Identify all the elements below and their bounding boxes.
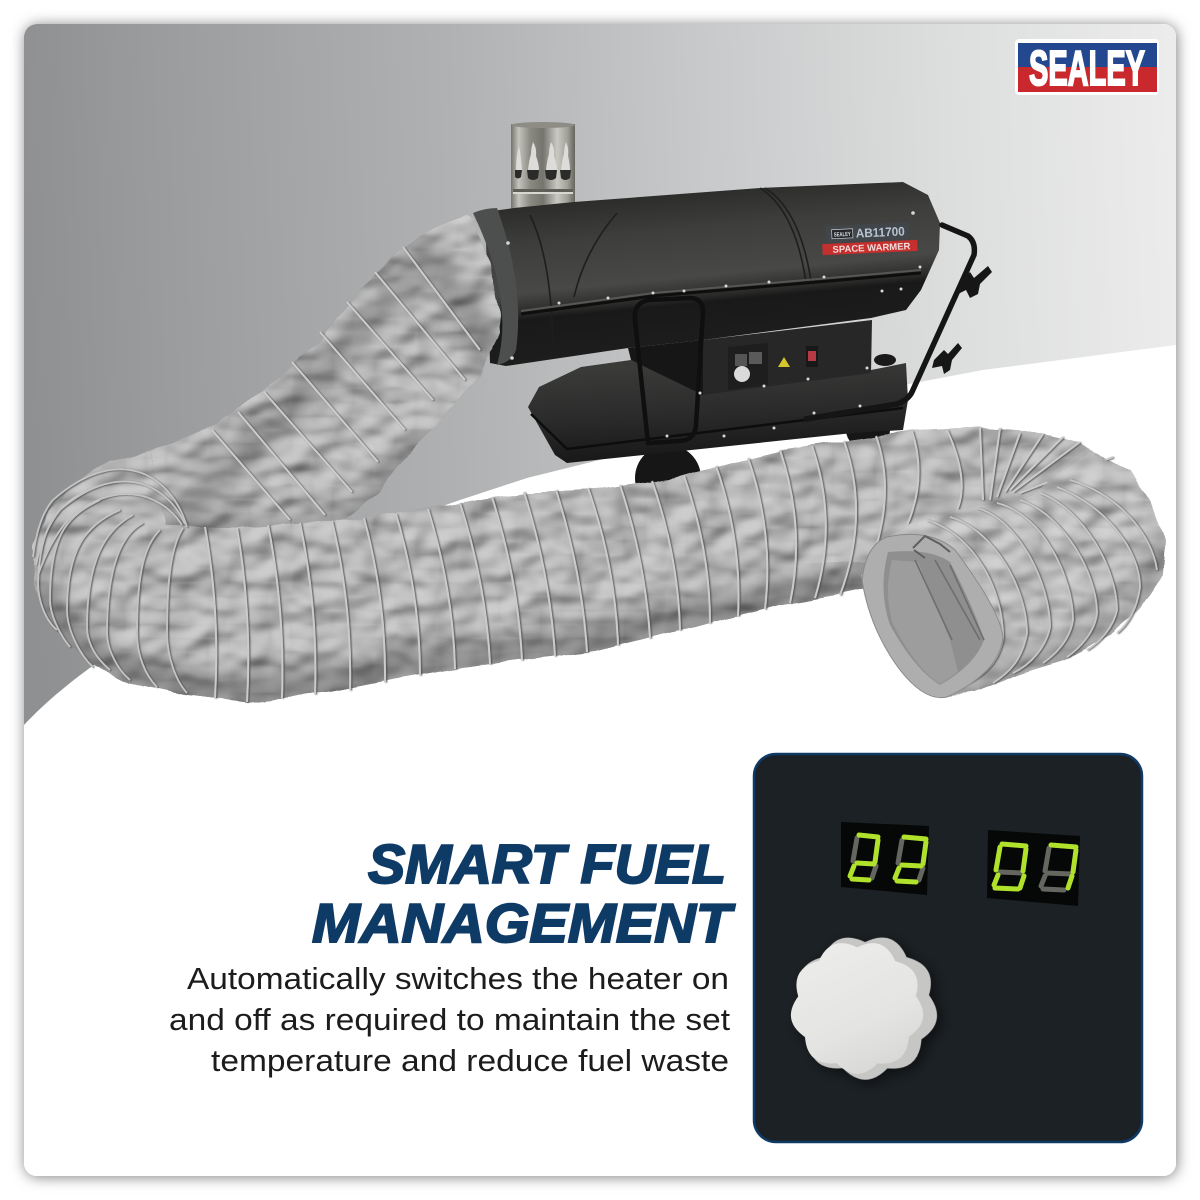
- rating label: [821, 222, 918, 256]
- description text: [169, 961, 730, 1078]
- description text: temperature and reduce fuel waste: [211, 1043, 729, 1078]
- hose: open end: [862, 534, 1003, 698]
- ribs: left bend fan: [33, 469, 187, 693]
- heater unit: [473, 122, 992, 511]
- heater body cylinder: [473, 182, 940, 366]
- title: SMART FUEL: [368, 833, 726, 895]
- ribs: long run: [205, 428, 1113, 702]
- screws: [506, 211, 922, 438]
- display: right 07: [987, 830, 1080, 906]
- wheels: [635, 410, 890, 511]
- logo: Sealey: [1015, 39, 1159, 96]
- control panel: [628, 320, 872, 395]
- rating label: AB11700: [855, 224, 905, 241]
- panel: control close-up: [754, 754, 1142, 1142]
- hose: upper section to heater: [150, 215, 500, 535]
- title: MANAGEMENT: [312, 892, 736, 954]
- description text: Automatically switches the heater on: [187, 961, 729, 996]
- rating label: SPACE WARMER: [832, 241, 911, 256]
- fuel tank: [528, 354, 908, 463]
- rear push handle: [806, 225, 992, 419]
- title: [312, 833, 736, 954]
- display: left 22: [841, 822, 929, 895]
- knob: [772, 914, 957, 1097]
- description text: and off as required to maintain the set: [169, 1002, 730, 1037]
- hose: left bend and long lower run: [33, 428, 1130, 702]
- flexible ducting hose: [33, 215, 1165, 702]
- chimney: [511, 122, 575, 217]
- hose: right bend front section: [862, 450, 1165, 697]
- rating label: SEALEY: [834, 232, 851, 239]
- front carry handle: [635, 298, 703, 443]
